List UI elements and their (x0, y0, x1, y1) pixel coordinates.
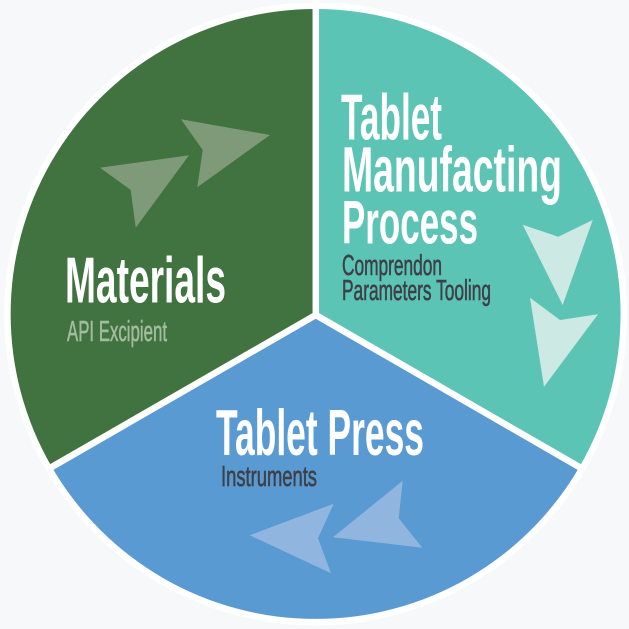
white dividers (50, 0, 581, 468)
heading: tablet manufacting process: Tablet (341, 80, 442, 153)
subtext: process: Parameters Tooling (342, 275, 491, 307)
arrow: press right (333, 481, 422, 548)
wedge: process (316, 9, 621, 466)
arrow: materials lower (100, 155, 189, 228)
heading: tablet manufacting process: Process (342, 188, 478, 256)
segment: tablet press (52, 315, 580, 619)
segment: materials (11, 9, 316, 466)
arrow: materials upper (181, 119, 270, 187)
subtext: process: Comprendon (342, 250, 442, 282)
segment: tablet manufacturing process (316, 9, 621, 466)
arrow: process upper (523, 220, 593, 305)
heading: tablet press: Tablet Press (216, 396, 424, 469)
subtext: materials: API Excipient (67, 316, 167, 348)
arrow: press left (250, 504, 334, 573)
subtext: process (342, 250, 491, 307)
heading: tablet manufacting process (341, 80, 562, 256)
heading: materials: Materials (65, 244, 226, 317)
arrow: process lower (530, 298, 598, 387)
wedge: press (52, 315, 580, 619)
wedge: materials (11, 9, 316, 466)
subtext: press: Instruments (221, 461, 317, 493)
